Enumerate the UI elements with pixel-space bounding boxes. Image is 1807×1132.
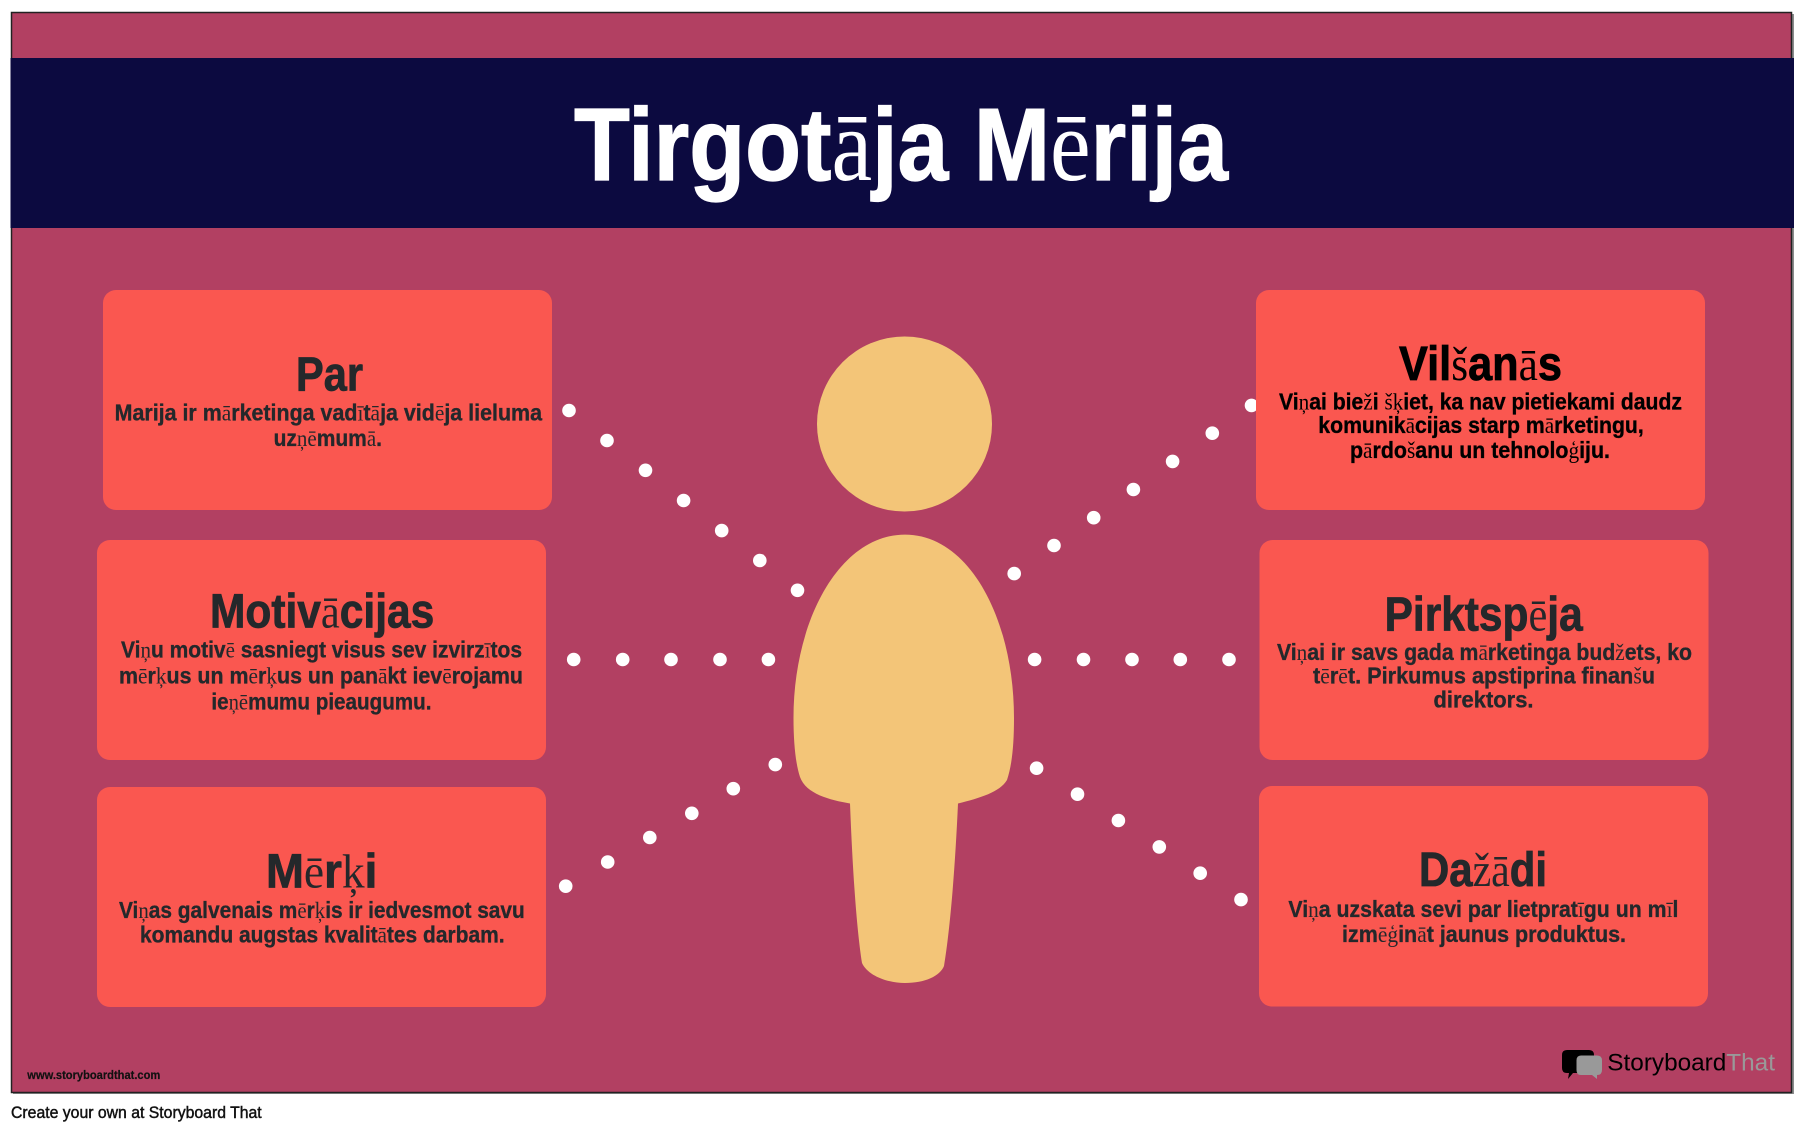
text block: Mērķi: Viņas galvenais mērķis ir iedvesmot savu bbox=[119, 897, 525, 924]
icon: person figure bbox=[794, 336, 1014, 983]
icon: speech bubbles bbox=[1562, 1050, 1602, 1079]
footer caption: Create your own at Storyboard That bbox=[11, 1104, 262, 1122]
dotted connector: Pirktspēja bbox=[1028, 653, 1236, 666]
text block: Pirktspēja: direktors. bbox=[1434, 686, 1534, 712]
dotted connector: Mērķi bbox=[559, 758, 782, 893]
text block: Vilšanās: pārdošanu un tehnoloģiju. bbox=[1350, 437, 1610, 464]
dotted connector: Dažādi bbox=[1030, 761, 1248, 906]
panel: Dažādi bbox=[1259, 786, 1708, 1006]
text block: Pirktspēja: tērēt. Pirkumus apstiprina finanšu bbox=[1313, 662, 1655, 689]
text block: Mērķi: komandu augstas kvalitātes darbam. bbox=[140, 922, 505, 948]
text block: Par: uzņēmumā. bbox=[274, 425, 382, 452]
dotted connector: Motivācijas bbox=[567, 653, 775, 666]
heading: Pirktspēja: Pirktspēja bbox=[1385, 588, 1583, 641]
heading: Dažādi: Dažādi bbox=[1419, 844, 1547, 897]
heading: Par: Par bbox=[296, 349, 363, 402]
text block: Mērķi bbox=[119, 897, 525, 948]
text block: Dažādi: izmēģināt jaunus produktus. bbox=[1342, 921, 1626, 948]
text block: Motivācijas bbox=[119, 637, 523, 716]
text block: Par bbox=[115, 400, 543, 452]
text block: Dažādi: Viņa uzskata sevi par lietpratīgu un mīl bbox=[1288, 896, 1678, 923]
text block: Dažādi bbox=[1288, 896, 1678, 948]
panel: Par bbox=[103, 290, 552, 510]
dotted connector: Par bbox=[562, 404, 804, 597]
panel: Mērķi bbox=[97, 787, 546, 1007]
text block: Motivācijas: ieņēmumu pieaugumu. bbox=[211, 689, 432, 716]
text block: Par: Marija ir mārketinga vadītāja vidēja lieluma bbox=[115, 400, 543, 427]
panel: Motivācijas bbox=[97, 540, 546, 760]
text block: Pirktspēja bbox=[1277, 639, 1692, 712]
heading: Motivācijas: Motivācijas bbox=[210, 585, 434, 638]
text block: Vilšanās: komunikācijas starp mārketingu, bbox=[1318, 412, 1644, 439]
logo wordmark: StoryboardThat bbox=[1607, 1050, 1775, 1077]
title: Tirgotāja Mērija bbox=[574, 87, 1229, 203]
website text: www.storyboardthat.com bbox=[26, 1068, 160, 1082]
heading: Mērķi: Mērķi bbox=[266, 845, 377, 898]
logo: Storyboard That bbox=[1562, 1050, 1775, 1079]
text block: Motivācijas: Viņu motivē sasniegt visus sev izvirzītos bbox=[121, 637, 522, 664]
text block: Pirktspēja: Viņai ir savs gada mārketinga budžets, ko bbox=[1277, 639, 1692, 666]
panel: Pirktspēja bbox=[1260, 540, 1708, 760]
heading: Vilšanās: Vilšanās bbox=[1399, 338, 1562, 391]
title banner bbox=[10, 58, 1794, 228]
dotted connector: Vilšanās bbox=[1007, 399, 1258, 580]
text block: Motivācijas: mērķus un mērķus un panākt ievērojamu bbox=[119, 663, 523, 690]
text block: Vilšanās: Viņai bieži šķiet, ka nav pietiekami daudz bbox=[1279, 389, 1682, 416]
panel: Vilšanās bbox=[1256, 290, 1705, 510]
text block: Vilšanās bbox=[1279, 389, 1682, 464]
